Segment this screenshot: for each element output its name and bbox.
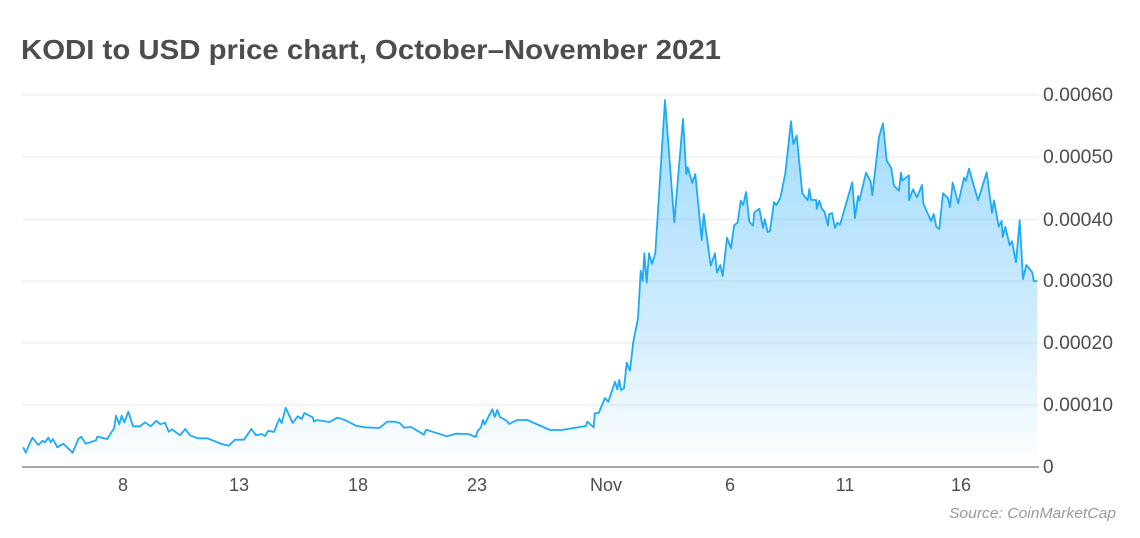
area fill under price line xyxy=(23,100,1037,467)
x axis labels: 8 xyxy=(118,475,128,495)
x axis labels: 23 xyxy=(467,475,487,495)
x axis labels: 13 xyxy=(229,475,249,495)
title: KODI to USD price chart, October–November 2021 xyxy=(21,34,721,65)
x axis labels: 18 xyxy=(348,475,368,495)
y axis labels: 0.00020 xyxy=(1043,333,1113,354)
gridlines xyxy=(22,95,1039,405)
price area chart xyxy=(22,95,1039,467)
source note: Source: CoinMarketCap xyxy=(949,506,1116,522)
x axis labels: Nov xyxy=(590,475,622,495)
x axis line xyxy=(22,466,1039,468)
y axis labels: 0.00040 xyxy=(1043,210,1113,231)
x axis labels: 16 xyxy=(951,475,971,495)
y axis labels: 0.00030 xyxy=(1043,271,1113,292)
price line xyxy=(23,100,1037,453)
x axis labels: 11 xyxy=(836,475,854,495)
y axis labels: 0.00050 xyxy=(1043,147,1113,168)
y axis labels: 0.00010 xyxy=(1043,395,1113,416)
x axis labels xyxy=(118,475,971,495)
x axis labels: 6 xyxy=(725,475,735,495)
y axis labels: 0.00060 xyxy=(1043,85,1113,106)
y axis labels: 0 xyxy=(1043,457,1054,478)
y axis labels xyxy=(1043,85,1113,478)
